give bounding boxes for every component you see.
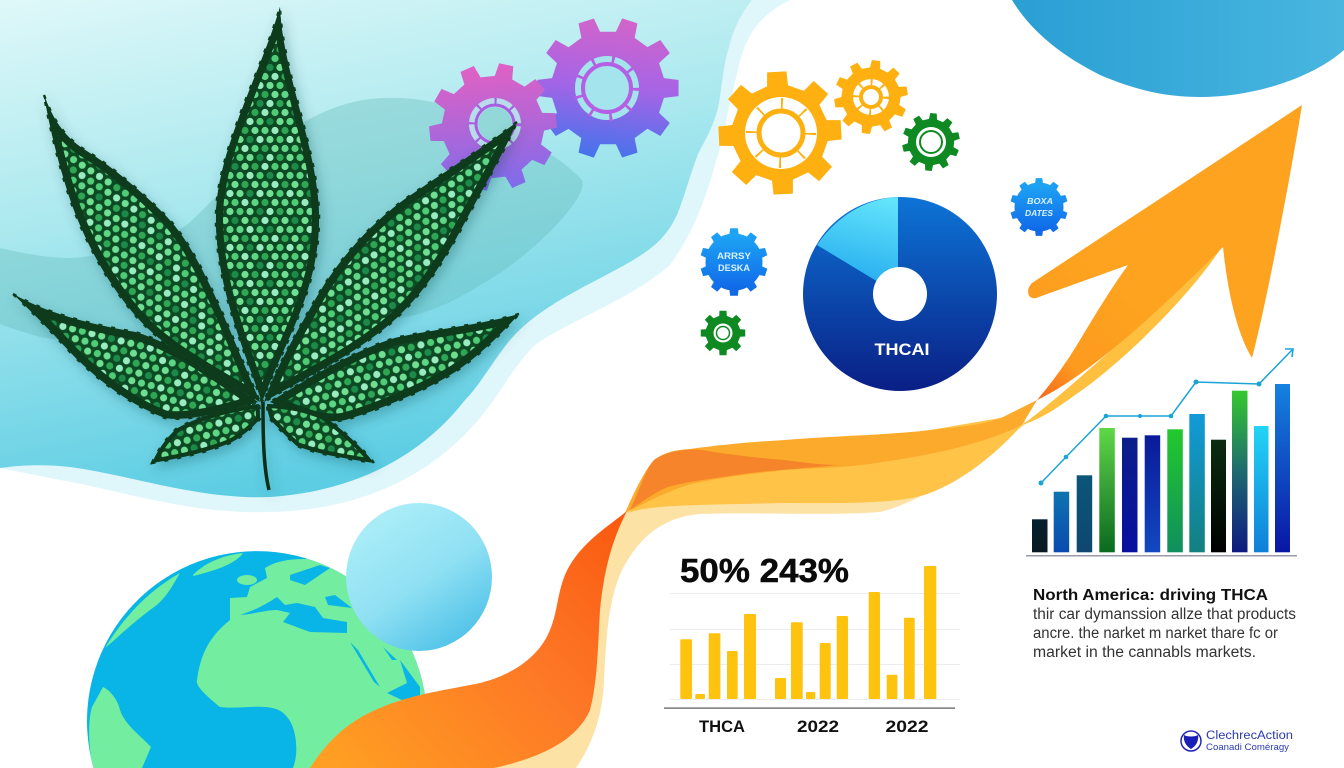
globe [87,551,430,768]
leaf: upper left blade [44,95,260,402]
arrow: yellow edge [1022,247,1222,425]
globe: Africa and Eurasia [197,559,430,768]
globe: North America rim [105,573,180,648]
logo: Coanadi Coméragy [1206,742,1289,753]
ribbon: main orange band [310,511,627,768]
logo: ClechrecAction [1206,730,1293,742]
text block: North America: thir car dymanssion allze that products [1033,606,1296,623]
icon: blue gear with label left: DESKA [718,263,750,273]
icon: blue gear with label left [701,228,767,296]
ribbon: amber top layer [625,400,1037,513]
text block: North America [1033,587,1296,661]
icon: large orange gear [716,69,844,197]
background: darker teal blob [0,98,583,341]
globe: seas [240,565,420,700]
icon: blue gear with label right [1011,178,1067,236]
yellow bars [680,566,936,699]
yellow statistics chart [664,552,960,736]
logo: emblem [1181,731,1201,751]
axis labels: 2022 [886,717,928,736]
icon: purple gear right [520,0,696,177]
axis labels [699,717,928,736]
donut chart [803,197,997,391]
line chart: trend with arrow [1038,349,1293,486]
flowing ribbon into growth arrow [310,105,1302,768]
axis labels: THCA [699,717,745,736]
light blue sphere [346,503,492,651]
axis labels: 2022 [797,717,839,736]
leaf: small bottom left blade [152,404,260,463]
bar chart: bars [1032,384,1290,552]
background: pale outer wave [0,0,790,512]
icon: blue gear with label right: DATES [1025,209,1054,218]
leaf: lower right blade [270,314,519,421]
icon: small green gear [701,311,745,355]
ribbon: pale layer [494,420,1027,768]
arrow: head and shaft [1028,105,1302,400]
icon: green gear [900,111,962,173]
icon: medium orange gear [830,56,912,138]
leaf: top blade [216,7,319,402]
logo [1181,730,1293,753]
globe: Greenland [193,553,243,576]
leaf: stem [263,402,269,490]
stat heading: 50% 243% [680,552,849,589]
globe: UK [237,575,257,585]
ribbon: yellow layer [628,418,1022,513]
icon: blue gear with label right: BOXA [1027,197,1053,206]
donut: light blue segment [817,197,898,294]
ribbon: dark orange fold [630,449,838,510]
text block: North America: ancre. the narket m narket thare fc or [1033,625,1278,642]
leaf: lower left blade [13,294,258,419]
bar and line chart [1026,349,1297,556]
cannabis leaf made of dots [13,7,519,490]
icon: purple gear left [418,52,568,202]
text block: North America: market in the cannabls markets. [1033,644,1256,661]
background: teal wave panel [0,0,752,497]
leaf: small bottom right blade [267,404,374,463]
text block: North America: North America: driving THCA [1033,587,1268,604]
icon: blue gear with label left: ARRSY [717,251,751,261]
leaf: upper right blade [264,122,517,402]
donut: label: THCAI [874,340,930,359]
background: top-right blue blob [1012,0,1344,97]
globe: South America [89,687,151,768]
